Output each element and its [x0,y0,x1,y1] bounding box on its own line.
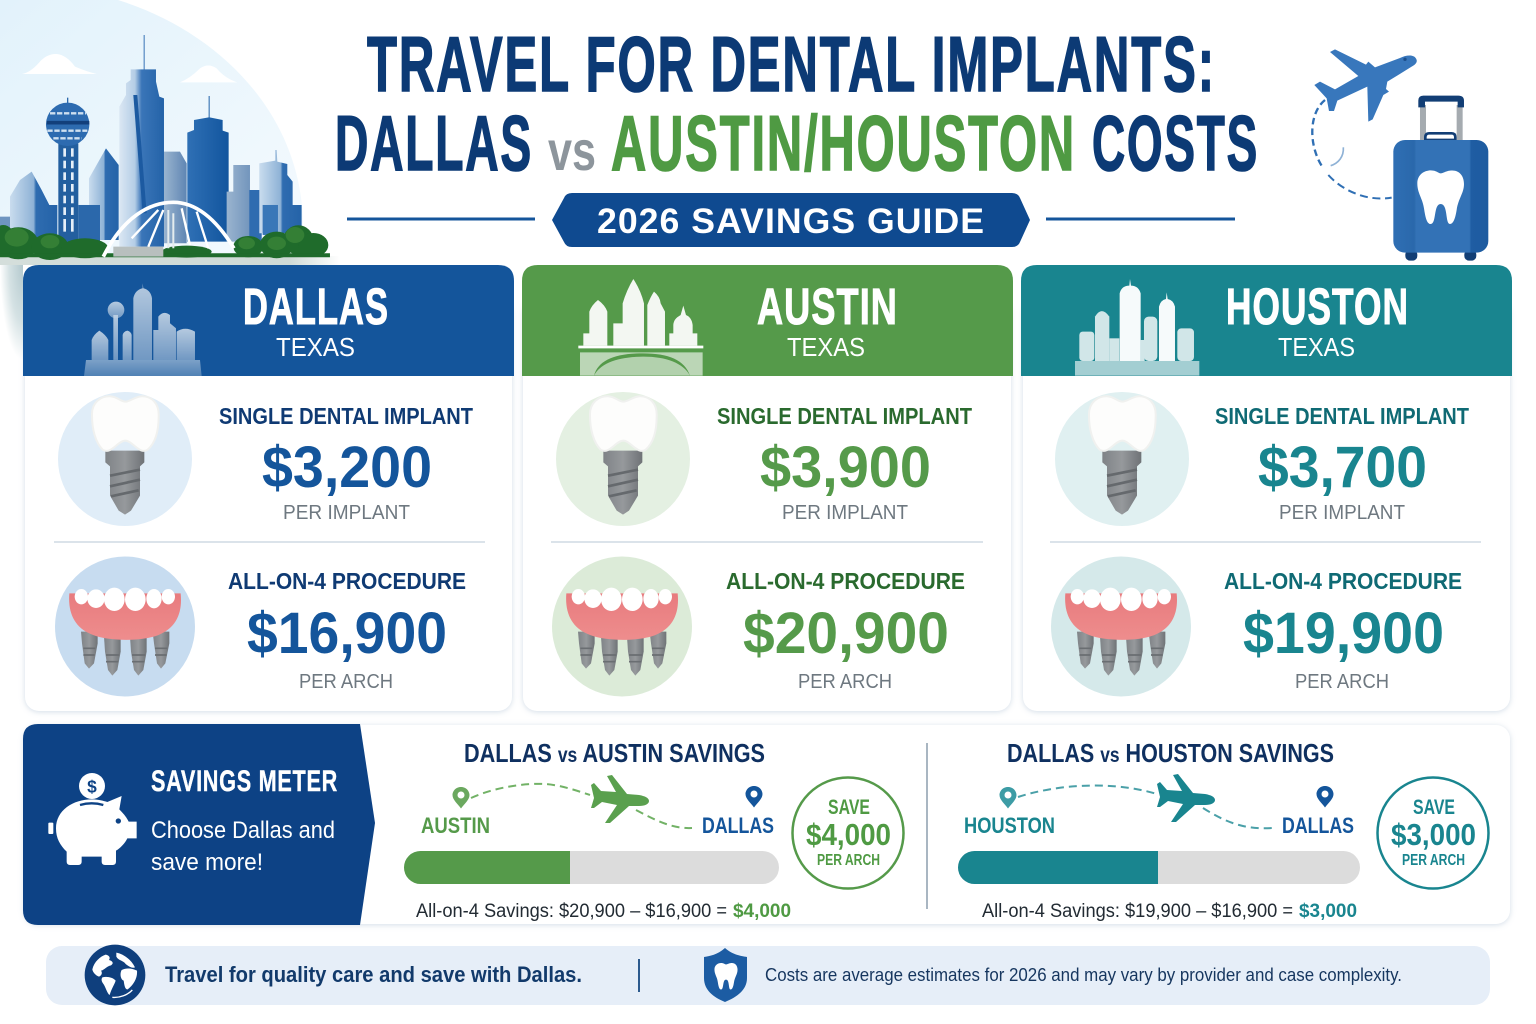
city name: TEXAS [276,332,355,362]
single implant price: SINGLE DENTAL IMPLANT [1215,403,1469,429]
heading: DALLAS vs AUSTIN SAVINGS [464,738,765,768]
city name [757,278,898,362]
city name: DALLAS [243,278,389,335]
single implant price: SINGLE DENTAL IMPLANT [219,403,473,429]
card body [1023,300,1510,711]
savings meter text: SAVINGS METER [151,765,338,798]
card body [25,300,512,711]
icon: piggy bank [48,773,137,865]
panel: savings section [23,724,1510,925]
subtitle banner [347,193,1235,247]
all-on-4 price: $16,900 [247,601,447,666]
savings bar [958,851,1360,884]
savings formula: $4,000 [733,901,791,922]
card body [523,300,1011,711]
all-on-4 price: ALL-ON-4 PROCEDURE [1224,568,1462,594]
route with plane: DALLAS [1282,813,1354,838]
icon: Dallas mini skyline [84,283,202,376]
panel: Austin [522,265,1013,711]
badge: save $3,000 [1378,778,1488,888]
city name [1226,278,1409,362]
savings formula: All-on-4 Savings: $20,900 – $16,900 = [416,901,727,922]
single implant price [1215,403,1469,524]
header [23,265,514,376]
comparison: Dallas vs Houston [958,738,1488,922]
icon: piggy bank: $ [87,777,97,797]
single implant price [219,403,473,524]
single implant price: PER IMPLANT [1279,502,1405,524]
icon: airplane with suitcase [1312,49,1488,261]
savings bar [404,851,779,884]
icon: single implant [58,392,192,526]
badge: save $3,000: $3,000 [1391,817,1476,852]
savings meter text: Choose Dallas and [151,817,335,844]
badge: save $4,000 [792,778,904,888]
icon: single implant [556,392,690,526]
header [522,265,1013,376]
all-on-4 price [228,568,466,693]
icon: all-on-4 arch [552,556,692,696]
all-on-4 price [726,568,965,693]
icon: all-on-4 arch [55,556,195,696]
savings meter text: save more! [151,849,263,876]
disclaimer: Costs are average estimates for 2026 and may vary by provider and case complexity. [765,965,1402,985]
route with plane: AUSTIN [421,813,490,838]
city name: HOUSTON [1226,278,1409,335]
title: AUSTIN/HOUSTON [611,99,1076,187]
panel: savings meter [23,724,375,925]
icon: single implant [1055,392,1189,526]
all-on-4 price: PER ARCH [299,671,393,693]
badge: save $4,000: $4,000 [806,817,891,852]
city name: TEXAS [787,332,865,362]
city name [243,278,389,362]
icon: Houston mini skyline [1075,279,1199,376]
city name: TEXAS [1278,332,1355,362]
all-on-4 price: PER ARCH [1295,671,1389,693]
single implant price: PER IMPLANT [782,502,908,524]
route with plane: HOUSTON [964,813,1055,838]
all-on-4 price: ALL-ON-4 PROCEDURE [726,568,965,594]
heading: DALLAS vs HOUSTON SAVINGS [1007,738,1334,768]
route with plane [421,775,774,838]
subtitle banner: 2026 SAVINGS GUIDE [597,202,985,241]
all-on-4 price: $19,900 [1243,601,1444,666]
all-on-4 price: PER ARCH [798,671,892,693]
icon: all-on-4 arch [1051,556,1191,696]
footer band [46,945,1490,1005]
route with plane [964,774,1354,838]
single implant price: PER IMPLANT [283,502,410,524]
single implant price: $3,700 [1258,435,1427,500]
single implant price: $3,900 [760,435,931,500]
savings formula: $3,000 [1299,901,1357,922]
city name: AUSTIN [757,278,898,335]
savings meter text [151,765,338,876]
panel: Houston [1021,265,1512,711]
single implant price: $3,200 [262,435,432,500]
badge: save $3,000: SAVE [1413,796,1455,819]
route with plane: DALLAS [702,813,774,838]
single implant price: SINGLE DENTAL IMPLANT [717,403,972,429]
panel: Dallas [23,265,514,711]
badge: save $3,000: PER ARCH [1402,852,1465,869]
icon: Austin mini skyline [578,279,703,376]
all-on-4 price: ALL-ON-4 PROCEDURE [228,568,466,594]
icon: shield with tooth [704,948,747,1002]
title: vs [548,119,596,182]
all-on-4 price: $20,900 [743,601,949,666]
title [335,20,1259,187]
all-on-4 price [1224,568,1462,693]
savings formula: All-on-4 Savings: $19,900 – $16,900 = [982,901,1293,922]
icon: globe [85,945,145,1005]
title: COSTS [1092,99,1259,187]
footer message: Travel for quality care and save with Dallas. [165,962,582,987]
comparison: Dallas vs Austin [404,738,904,922]
single implant price [717,403,972,524]
title: DALLAS [335,99,533,187]
badge: save $4,000: PER ARCH [817,852,880,869]
badge: save $4,000: SAVE [828,796,870,819]
illustration: Dallas skyline [0,0,340,360]
header [1021,265,1512,376]
